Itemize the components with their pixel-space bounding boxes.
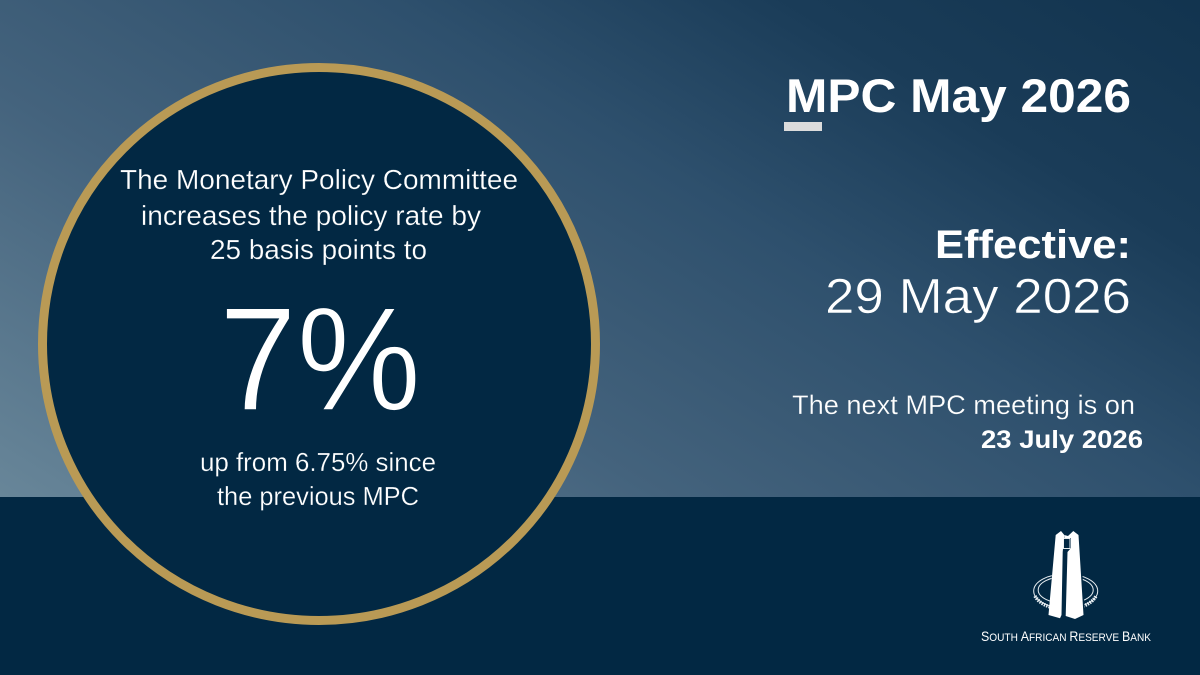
next meeting block: 23 July 2026	[981, 426, 1143, 454]
circle closing text	[200, 447, 436, 511]
effective date block	[825, 223, 1131, 324]
title: MPC May 2026	[786, 69, 1131, 122]
policy rate figure: 7%	[219, 277, 421, 442]
circle intro text: The Monetary Policy Committee	[120, 164, 518, 195]
logo wordmark: SOUTH AFRICAN RESERVE BANK	[981, 629, 1152, 644]
icon: tower	[1048, 531, 1084, 619]
effective date block: 29 May 2026	[825, 270, 1131, 324]
gold ring circle	[42, 68, 596, 620]
circle intro text: increases the policy rate by	[141, 200, 481, 231]
circle intro text	[120, 164, 518, 265]
circle intro text: 25 basis points to	[210, 234, 427, 265]
circle closing text: up from 6.75% since	[200, 447, 436, 477]
icon: coin ring	[1034, 574, 1098, 609]
next meeting block	[792, 390, 1143, 454]
background gradient panel	[0, 0, 1200, 497]
panel: policy rate circle	[42, 68, 596, 620]
next meeting block: The next MPC meeting is on	[792, 390, 1135, 420]
circle closing text: the previous MPC	[217, 481, 419, 511]
bottom band	[0, 497, 1200, 675]
effective date block: Effective:	[935, 223, 1131, 267]
logo: South African Reserve Bank	[981, 531, 1152, 644]
title underline accent	[784, 122, 822, 131]
